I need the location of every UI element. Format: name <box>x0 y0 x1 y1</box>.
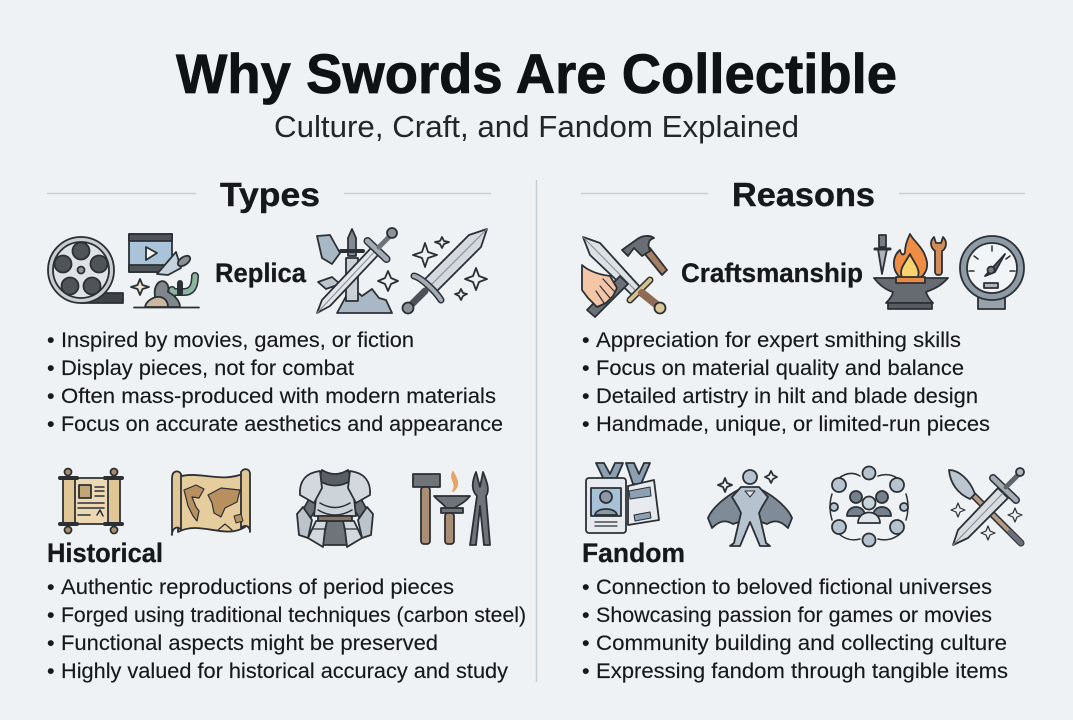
list: craftsmanship points: • <box>582 356 590 380</box>
icon: anvil with flame <box>874 234 948 309</box>
list: replica points: • <box>47 328 55 352</box>
heading: reasons: Reasons <box>732 176 875 213</box>
subtitle: Culture, Craft, and Fandom Explained <box>274 109 799 144</box>
list: historical points: • <box>47 659 55 683</box>
icon: community circle <box>830 466 908 546</box>
list: fandom points: • <box>582 659 590 683</box>
panel: reasons <box>582 176 1024 683</box>
icon: blacksmith tools <box>413 472 490 545</box>
list: historical points: Functional aspects might be preserved <box>61 631 438 655</box>
list: historical points <box>47 575 526 683</box>
list: replica points: • <box>47 356 55 380</box>
list: historical points: • <box>47 575 55 599</box>
list: craftsmanship points: • <box>582 384 590 408</box>
list: historical points: Authentic reproductions of period pieces <box>61 575 454 599</box>
list: historical points: Highly valued for historical accuracy and study <box>61 659 508 683</box>
list: replica points: Display pieces, not for combat <box>61 356 354 380</box>
icon: crossed spear and sword <box>949 468 1024 545</box>
list: replica points: Focus on accurate aesthetics and appearance <box>61 412 503 436</box>
panel: types <box>47 176 526 683</box>
icon: sword with sparkles <box>402 229 487 314</box>
icon: film strip and fantasy scene <box>129 234 199 308</box>
list: historical points: • <box>47 631 55 655</box>
list: craftsmanship points <box>582 328 990 436</box>
label: craftsmanship: Craftsmanship <box>681 258 863 288</box>
list: fandom points: • <box>582 631 590 655</box>
list: craftsmanship points: Detailed artistry in hilt and blade design <box>596 384 978 408</box>
list: fandom points <box>582 575 1008 683</box>
icon: crossed swords with crystal <box>317 228 398 313</box>
icon: id badges <box>586 463 659 533</box>
list: fandom points: • <box>582 603 590 627</box>
list: historical points: Forged using traditional techniques (carbon steel) <box>61 603 526 627</box>
list: replica points: Often mass-produced with modern materials <box>61 384 496 408</box>
icon: plate armor <box>297 470 373 547</box>
list: fandom points: Showcasing passion for games or movies <box>596 603 992 627</box>
list: replica points <box>47 328 503 436</box>
list: replica points: Inspired by movies, games, or fiction <box>61 328 414 352</box>
label: historical: Historical <box>47 538 163 568</box>
heading: types: Types <box>220 176 320 213</box>
list: replica points: • <box>47 384 55 408</box>
icon: document scroll <box>60 468 122 534</box>
icon: pressure gauge <box>960 236 1024 309</box>
list: replica points: • <box>47 412 55 436</box>
icon: hammer and sword in hand <box>582 236 667 317</box>
section: historical <box>47 468 526 683</box>
label: replica: Replica <box>215 258 307 288</box>
list: craftsmanship points: Focus on material quality and balance <box>596 356 964 380</box>
section: replica <box>47 228 503 436</box>
label: fandom: Fandom <box>582 538 685 568</box>
list: craftsmanship points: Handmade, unique, or limited-run pieces <box>596 412 990 436</box>
section: fandom <box>582 463 1024 683</box>
list: fandom points: • <box>582 575 590 599</box>
icon: caped hero <box>708 470 792 546</box>
section: craftsmanship <box>582 234 1024 436</box>
list: fandom points: Community building and collecting culture <box>596 631 1007 655</box>
list: fandom points: Connection to beloved fictional universes <box>596 575 992 599</box>
list: craftsmanship points: • <box>582 412 590 436</box>
list: fandom points: Expressing fandom through tangible items <box>596 659 1008 683</box>
list: historical points: • <box>47 603 55 627</box>
title: Why Swords Are Collectible <box>176 42 897 105</box>
list: craftsmanship points: • <box>582 328 590 352</box>
icon: film reel <box>48 237 123 303</box>
list: craftsmanship points: Appreciation for expert smithing skills <box>596 328 961 352</box>
icon: world map <box>172 469 250 535</box>
